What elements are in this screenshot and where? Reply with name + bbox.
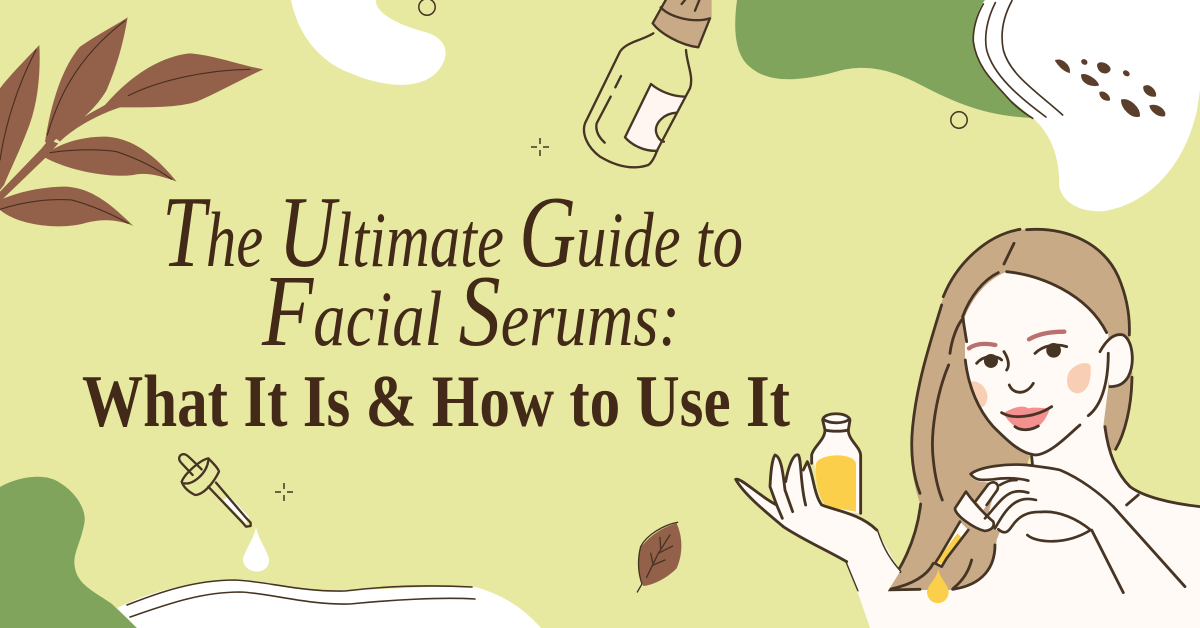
title line 2 script: Facial Serums:	[261, 254, 680, 367]
eyes	[984, 343, 1061, 368]
icon: small circle top	[419, 0, 435, 15]
blob: white top centre	[291, 0, 446, 85]
serum dropper and right hand	[927, 465, 1113, 603]
ear	[1100, 335, 1132, 387]
icon: serum bottle top	[584, 0, 712, 167]
title line 1 script: The Ultimate Guide to	[162, 175, 743, 288]
body skin	[847, 427, 1200, 628]
icon: small brown leaf	[637, 522, 681, 592]
blob: green bottom left	[0, 477, 137, 628]
wave lines bottom	[127, 580, 475, 617]
lips	[1003, 407, 1050, 431]
icon: sparkle top	[531, 138, 549, 156]
blob: green top right	[735, 0, 1040, 118]
eyebrows	[969, 332, 1064, 348]
dropper bulb and collar	[975, 482, 998, 510]
left hand	[736, 455, 900, 620]
blob: white top right	[974, 0, 1200, 211]
icon: small circle right	[951, 112, 967, 128]
blob: white bottom	[117, 579, 541, 628]
icon: brown branch	[0, 17, 263, 226]
title line 3 serif: What It Is & How to Use It	[82, 361, 790, 443]
icon: sparkle bottom	[275, 483, 293, 501]
oil bottle in hand	[812, 413, 861, 513]
icon: dropper left	[179, 454, 252, 527]
seed dots top right	[1056, 59, 1165, 116]
illustration: woman with serum	[736, 229, 1200, 628]
hair and face lines	[847, 229, 1200, 593]
dropper tube	[935, 522, 968, 567]
title text	[82, 175, 790, 443]
right hand fill	[971, 465, 1113, 540]
cheeks	[971, 363, 1091, 407]
neck and face	[965, 272, 1130, 507]
wave lines top right	[973, 1, 1063, 118]
yellow serum drop	[927, 569, 949, 603]
hair	[883, 229, 1133, 590]
icon: white drop	[243, 527, 269, 572]
